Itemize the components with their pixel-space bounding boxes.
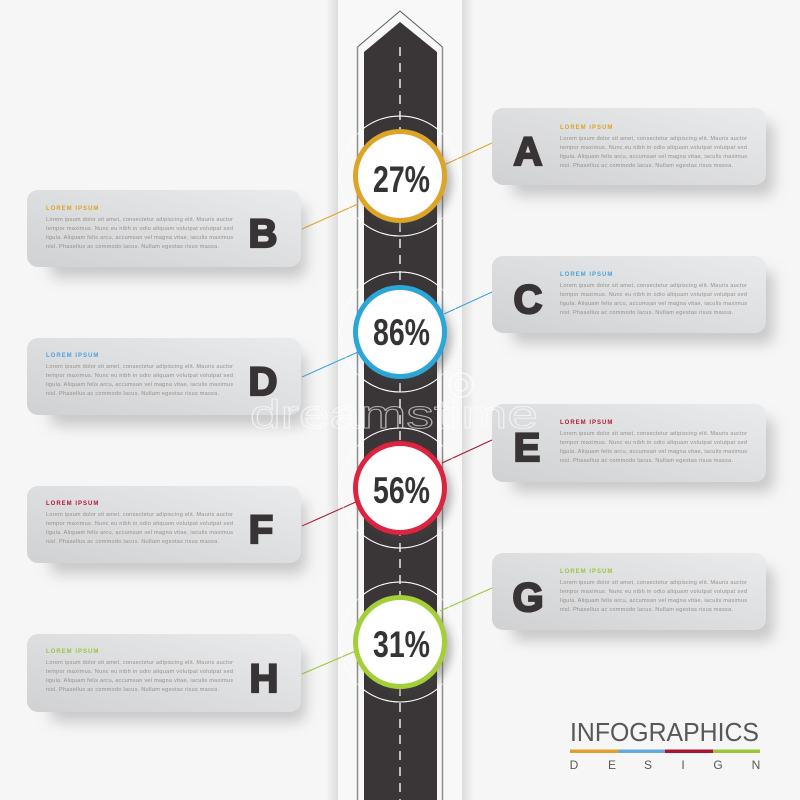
card H: H (250, 657, 278, 701)
marker 56%: 56% (373, 470, 430, 511)
connector H (302, 650, 358, 674)
card G: ligula. Aliquam felis arcu, accumsan vel magna vitae, iaculis maximus (560, 598, 747, 604)
card F: LOREM IPSUM (46, 501, 99, 507)
marker 27%: 27% (373, 159, 430, 200)
connector D (302, 352, 358, 377)
card F (27, 486, 306, 574)
card D (27, 338, 306, 426)
card A: ligula. Aliquam felis arcu, accumsan vel magna vitae, iaculis maximus (560, 154, 747, 160)
connector G (440, 588, 492, 611)
card D: LOREM IPSUM (46, 353, 99, 359)
card G: LOREM IPSUM (560, 569, 613, 575)
card G: tempor maximus. Nunc eu nibh in odio aliquam volutpat volutpat sed (560, 589, 747, 595)
card E: tempor maximus. Nunc eu nibh in odio aliquam volutpat volutpat sed (560, 440, 747, 446)
marker 56% (340, 428, 460, 548)
card F: nisl. Phasellus ac commodo lacus. Nullam egestas risus massa. (46, 539, 219, 545)
watermark: dreamstime (250, 393, 538, 437)
card G: Lorem ipsum dolor sit amet, consectetur adipiscing elit. Mauris auctor (560, 580, 747, 586)
card B (27, 190, 306, 278)
card C: ligula. Aliquam felis arcu, accumsan vel magna vitae, iaculis maximus (560, 301, 747, 307)
title block: G (713, 758, 723, 772)
title block: S (644, 758, 652, 772)
road side strips (326, 0, 474, 800)
card H: LOREM IPSUM (46, 649, 99, 655)
card G: nisl. Phasellus ac commodo lacus. Nullam egestas risus massa. (560, 607, 733, 613)
title block (570, 719, 760, 772)
card B: tempor maximus. Nunc eu nibh in odio aliquam volutpat volutpat sed (46, 226, 233, 232)
connector C (444, 292, 492, 314)
card E: Lorem ipsum dolor sit amet, consectetur adipiscing elit. Mauris auctor (560, 431, 747, 437)
road arrow (364, 22, 437, 800)
card E: E (514, 426, 540, 470)
marker 86% (340, 272, 460, 392)
card A: A (514, 130, 542, 174)
title block: D (570, 758, 579, 772)
card F: ligula. Aliquam felis arcu, accumsan vel magna vitae, iaculis maximus (46, 530, 233, 536)
watermark (250, 373, 538, 437)
card E: LOREM IPSUM (560, 420, 613, 426)
card A (492, 108, 774, 196)
card H: Lorem ipsum dolor sit amet, consectetur adipiscing elit. Mauris auctor (46, 660, 233, 666)
card B: LOREM IPSUM (46, 206, 99, 212)
card H (27, 634, 306, 722)
card D: Lorem ipsum dolor sit amet, consectetur adipiscing elit. Mauris auctor (46, 364, 233, 370)
card E (492, 404, 774, 492)
card B: nisl. Phasellus ac commodo lacus. Nullam egestas risus massa. (46, 244, 219, 250)
card A: LOREM IPSUM (560, 125, 613, 131)
marker 31%: 31% (373, 624, 430, 665)
marker 27% (340, 116, 460, 236)
card A: nisl. Phasellus ac commodo lacus. Nullam egestas risus massa. (560, 163, 733, 169)
road centre dashes (399, 47, 401, 800)
card G (492, 553, 774, 641)
card D: ligula. Aliquam felis arcu, accumsan vel magna vitae, iaculis maximus (46, 382, 233, 388)
card B: Lorem ipsum dolor sit amet, consectetur adipiscing elit. Mauris auctor (46, 217, 233, 223)
card C: nisl. Phasellus ac commodo lacus. Nullam egestas risus massa. (560, 310, 733, 316)
card D: tempor maximus. Nunc eu nibh in odio aliquam volutpat volutpat sed (46, 373, 233, 379)
card C: Lorem ipsum dolor sit amet, consectetur adipiscing elit. Mauris auctor (560, 283, 747, 289)
connector A (444, 143, 492, 165)
title block: E (608, 758, 616, 772)
marker 31% (340, 582, 460, 702)
card F: F (249, 508, 273, 552)
card A: tempor maximus. Nunc eu nibh in odio aliquam volutpat volutpat sed (560, 145, 747, 151)
connector F (302, 501, 358, 526)
card H: ligula. Aliquam felis arcu, accumsan vel magna vitae, iaculis maximus (46, 678, 233, 684)
arrow outline (358, 11, 442, 800)
title block: N (752, 758, 760, 772)
card H: tempor maximus. Nunc eu nibh in odio aliquam volutpat volutpat sed (46, 669, 233, 675)
card C: LOREM IPSUM (560, 272, 613, 278)
card G: G (512, 576, 544, 620)
card C: tempor maximus. Nunc eu nibh in odio aliquam volutpat volutpat sed (560, 292, 747, 298)
card D: D (249, 360, 277, 404)
marker 86%: 86% (373, 312, 430, 353)
connector E (442, 440, 492, 463)
card B: B (249, 212, 277, 256)
card F: Lorem ipsum dolor sit amet, consectetur adipiscing elit. Mauris auctor (46, 512, 233, 518)
card D: nisl. Phasellus ac commodo lacus. Nullam egestas risus massa. (46, 391, 219, 397)
card H: nisl. Phasellus ac commodo lacus. Nullam egestas risus massa. (46, 687, 219, 693)
card E: ligula. Aliquam felis arcu, accumsan vel magna vitae, iaculis maximus (560, 449, 747, 455)
title block: INFOGRAPHICS (570, 719, 759, 747)
card C (492, 256, 774, 344)
title block: I (681, 758, 685, 772)
card B: ligula. Aliquam felis arcu, accumsan vel magna vitae, iaculis maximus (46, 235, 233, 241)
connector B (302, 204, 358, 229)
card E: nisl. Phasellus ac commodo lacus. Nullam egestas risus massa. (560, 458, 733, 464)
card A: Lorem ipsum dolor sit amet, consectetur adipiscing elit. Mauris auctor (560, 136, 747, 142)
card C: C (514, 278, 542, 322)
card F: tempor maximus. Nunc eu nibh in odio aliquam volutpat volutpat sed (46, 521, 233, 527)
